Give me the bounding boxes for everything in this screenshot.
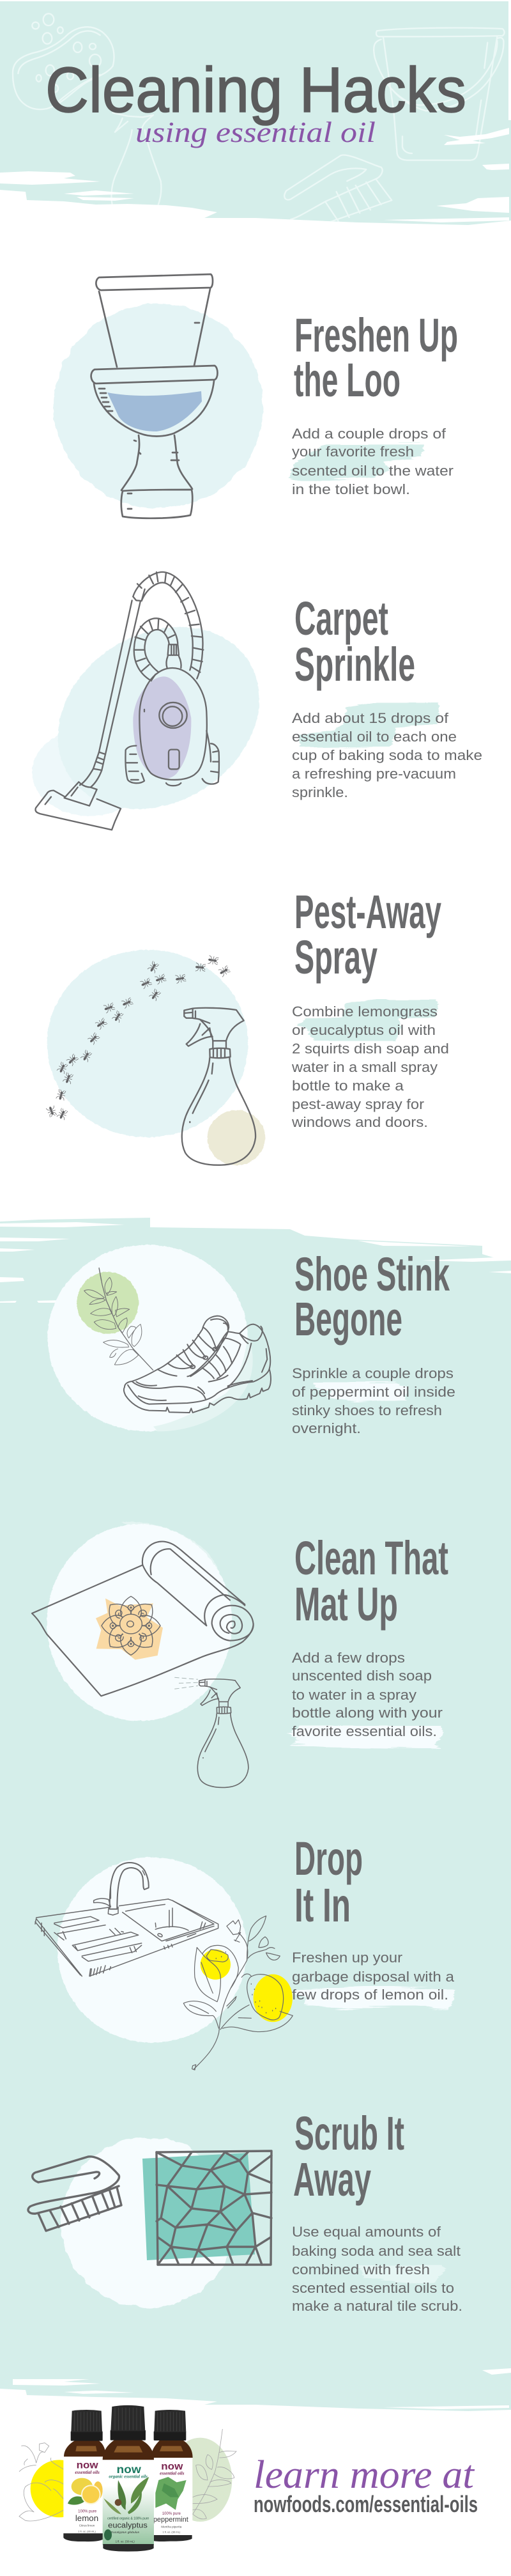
section 7 text: baking soda and sea salt	[292, 2243, 461, 2259]
section 3 text: or eucalyptus oil with	[292, 1022, 436, 1038]
footer: product bottles	[19, 2405, 236, 2552]
section 2 text: cup of baking soda to make	[292, 747, 482, 763]
section 7 text: Use equal amounts of	[292, 2224, 441, 2240]
section 1 text: in the toliet bowl.	[292, 481, 410, 497]
lemon branch	[183, 1916, 293, 2070]
section 7 highlight swash	[358, 2265, 446, 2283]
section 4 highlight swash	[313, 1383, 408, 1402]
section 3 text: Combine lemongrass	[292, 1004, 438, 1020]
bottle: peppermint: 1 fl. oz. (30 mL)	[162, 2531, 181, 2534]
section 5 text: to water in a spray	[292, 1687, 416, 1703]
mandala orange patch	[96, 1599, 163, 1660]
bottle: peppermint: now	[161, 2461, 183, 2472]
section 5 text: bottle along with your	[292, 1705, 443, 1721]
bottle: peppermint: Mentha piperita	[161, 2525, 182, 2528]
sneaker	[124, 1316, 271, 1413]
section 2 text	[292, 710, 482, 800]
section 5 heading: Mat Up	[294, 1578, 398, 1631]
section 3 text: windows and doors.	[291, 1114, 428, 1130]
section 5: yoga mat illustration	[32, 1522, 254, 1787]
bottle: eucalyptus	[103, 2405, 154, 2552]
section 1: toilet illustration	[54, 274, 263, 518]
section 6: sink and lemon illustration	[35, 1858, 293, 2070]
scrub brush	[28, 2157, 121, 2231]
bottle: lemon	[63, 2410, 106, 2541]
spray bottle	[182, 1008, 256, 1165]
section 5 heading	[294, 1532, 448, 1631]
bottle: peppermint: peppermint	[153, 2516, 188, 2524]
lemon yellow circles	[201, 1950, 231, 1980]
section 1 text: scented oil to the water	[292, 463, 454, 479]
subtitle: using essential oil: using essential oil	[135, 116, 376, 148]
section 5 text: Add a few drops	[292, 1650, 405, 1666]
section 6 heading: Drop	[294, 1832, 363, 1885]
section 6 text	[292, 1950, 455, 2003]
header background line art	[13, 13, 505, 222]
section 4 text: of peppermint oil inside	[292, 1384, 455, 1400]
section 1 heading: the Loo	[294, 353, 400, 407]
footer line art	[19, 2429, 236, 2521]
vacuum purple patch	[133, 676, 191, 779]
bottle: peppermint: 100% pure	[162, 2512, 181, 2516]
section 3 text	[291, 1004, 449, 1130]
section 6 heading	[294, 1832, 363, 1932]
section 1 highlight swash	[289, 444, 425, 481]
header white brush streaks	[0, 128, 509, 222]
section 3 highlight swash	[297, 999, 438, 1040]
section 7 text	[292, 2224, 462, 2314]
section 1 text	[292, 426, 454, 497]
section 1 text: your favorite fresh	[292, 444, 414, 460]
tile network	[156, 2151, 271, 2265]
section 5 text: unscented dish soap	[292, 1668, 432, 1684]
bottle: lemon: 1 fl. oz. (30 mL)	[78, 2529, 96, 2533]
section 2 highlight swash	[298, 703, 439, 748]
section 2 text: sprinkle.	[292, 784, 348, 800]
section 4 heading: Begone	[294, 1292, 402, 1346]
section 3 text: water in a small spray	[291, 1059, 438, 1075]
bottle: eucalyptus: Eucalyptus globulus	[111, 2531, 140, 2534]
section 4 heading	[294, 1248, 450, 1346]
bottle: eucalyptus: organic essential oils	[109, 2474, 148, 2479]
section 7: brush and tile illustration	[28, 2138, 271, 2308]
bottle: peppermint: essential oils	[160, 2471, 185, 2476]
mat outline	[32, 1542, 254, 1696]
section 4 text: stinky shoes to refresh	[292, 1402, 442, 1418]
section 7 text: scented essential oils to	[292, 2280, 454, 2296]
section 6 text: garbage disposal with a	[292, 1969, 455, 1985]
mandala	[102, 1596, 160, 1655]
section 7 heading: Scrub It	[294, 2107, 404, 2160]
band white streaks	[0, 1222, 511, 2409]
ant trail	[46, 956, 231, 1120]
section 6 text: few drops of lemon oil.	[292, 1987, 448, 2003]
section 2: vacuum illustration	[24, 572, 293, 846]
bottle: eucalyptus: now	[116, 2463, 142, 2476]
footer yellow and green circles	[31, 2438, 232, 2522]
bottle: eucalyptus: 1 fl. oz. (30 mL)	[116, 2540, 135, 2543]
section 3 heading	[294, 885, 441, 984]
section 5 text: favorite essential oils.	[292, 1723, 437, 1739]
section 3: spray and ants illustration	[46, 950, 265, 1165]
section 2 heading: Sprinkle	[294, 638, 415, 691]
teal tile patch	[142, 2153, 255, 2260]
sink outline	[35, 1863, 218, 1976]
bottle: lemon: 100% pure	[78, 2510, 97, 2514]
section 6 heading: It In	[294, 1879, 351, 1932]
section 1 text: Add a couple drops of	[292, 426, 446, 442]
small spray bottle and mist	[174, 1677, 248, 1787]
title: Cleaning Hacks: Cleaning Hacks	[45, 54, 466, 126]
section 1 heading	[294, 309, 458, 407]
section 4 text	[292, 1365, 455, 1436]
water in bowl	[107, 391, 202, 431]
section 3 text: bottle to make a	[292, 1078, 404, 1094]
header band	[0, 1, 511, 225]
section 2 text: essential oil to each one	[292, 729, 457, 745]
bottle: lemon: lemon	[75, 2513, 98, 2523]
section 6 text: Freshen up your	[292, 1950, 402, 1966]
bottle: lemon: Citrus limon	[79, 2524, 95, 2527]
bottle: lemon: now	[77, 2460, 98, 2471]
section 7 text: combined with fresh	[292, 2262, 430, 2277]
section 3 text: pest-away spray for	[292, 1096, 424, 1112]
section 2 heading	[294, 592, 415, 691]
section 4: shoe and peppermint illustration	[47, 1245, 271, 1431]
section 2 text: a refreshing pre-vacuum	[292, 766, 456, 782]
section 5 highlight swash	[287, 1726, 443, 1749]
section 7 heading	[293, 2107, 404, 2206]
section 2 heading: Carpet	[294, 592, 388, 645]
vacuum outline	[35, 572, 219, 830]
green circle	[77, 1272, 139, 1334]
section 2 text: Add about 15 drops of	[292, 710, 449, 726]
bottle: eucalyptus: certified organic & 100% pure	[107, 2517, 149, 2521]
footer: learn more at: learn more at	[254, 2453, 475, 2497]
beige fill circle	[208, 1110, 265, 1165]
bottle: eucalyptus: eucalyptus	[108, 2520, 148, 2529]
section 4 text: overnight.	[292, 1420, 361, 1436]
peppermint sprig	[84, 1268, 153, 1370]
toilet outline	[91, 274, 217, 518]
section 7 heading: Away	[293, 2153, 371, 2206]
bottle: lemon: essential oils	[75, 2469, 100, 2475]
section 4 text: Sprinkle a couple drops	[292, 1365, 454, 1381]
section 7 text: make a natural tile scrub.	[292, 2298, 462, 2314]
section 3 text: 2 squirts dish soap and	[292, 1041, 449, 1057]
section 6 highlight swash	[293, 1987, 455, 2009]
mint middle band	[0, 1218, 511, 2411]
section 3 heading: Spray	[294, 931, 378, 984]
bottle: peppermint	[151, 2410, 193, 2541]
section 5 text	[292, 1650, 443, 1739]
